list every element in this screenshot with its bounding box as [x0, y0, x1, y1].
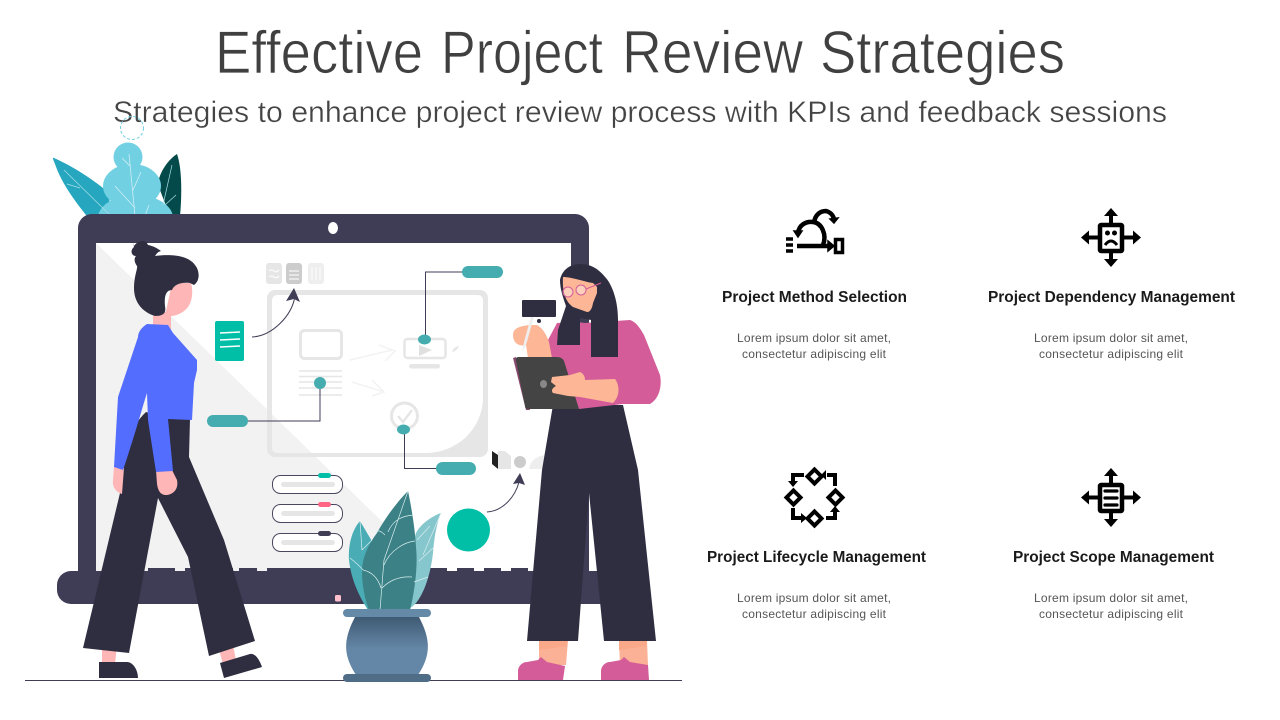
left woman hair [132, 238, 199, 316]
green circle [447, 508, 490, 552]
icon: dependency [1081, 208, 1141, 267]
pot rim [343, 609, 431, 617]
review panel [267, 290, 488, 457]
left woman [83, 238, 262, 678]
heading: Project Dependency Management [988, 289, 1235, 306]
right woman shirt [548, 320, 661, 409]
item: project method selection [722, 211, 907, 361]
tablet [513, 357, 579, 410]
illustration: project review scene [25, 116, 682, 682]
dashed circle decoration [120, 116, 144, 140]
laptop lid [78, 214, 589, 575]
left woman hands [113, 466, 177, 495]
potted plant [343, 491, 441, 682]
heading: Project Lifecycle Management [707, 549, 926, 566]
left woman shoes [99, 654, 262, 678]
laptop screen [96, 243, 571, 573]
icon: lifecycle [786, 470, 842, 526]
left woman trousers [83, 412, 255, 656]
description: Lorem ipsum dolor sit amet, [1034, 331, 1188, 345]
title: Effective [215, 19, 423, 86]
right woman ankles [539, 640, 648, 666]
arrow to tool icons [252, 288, 300, 337]
left woman ankles [102, 640, 236, 665]
description line 2: consectetur adipiscing elit [1039, 347, 1184, 361]
subtitle: Strategies to enhance project review process with KPIs and feedback sessions [113, 96, 1167, 129]
title: Project [441, 19, 603, 86]
black tag [522, 300, 556, 323]
item: project lifecycle management [707, 470, 926, 621]
connector: text callout [207, 377, 326, 427]
connector: video callout [418, 266, 503, 344]
pot foot [343, 674, 431, 682]
connector: check callout [397, 424, 476, 475]
right woman trousers [527, 405, 656, 641]
left woman shirt [114, 324, 197, 472]
camera [328, 222, 338, 234]
description: Lorem ipsum dolor sit amet, [737, 331, 891, 345]
right woman face [563, 277, 597, 312]
right woman shoes [518, 657, 649, 680]
check icon [392, 403, 418, 429]
description: Lorem ipsum dolor sit amet, [737, 591, 891, 605]
background plant [53, 142, 181, 241]
heading: Project Method Selection [722, 289, 907, 306]
icon: method cycle [786, 211, 842, 252]
title: Review [622, 19, 804, 86]
right woman lower hand [551, 372, 618, 403]
image placeholder [300, 330, 342, 358]
item: project scope management [1013, 468, 1214, 621]
laptop [57, 214, 602, 604]
base sensor [335, 595, 341, 602]
shape icons [492, 451, 545, 469]
pen [522, 313, 535, 352]
description line 2: consectetur adipiscing elit [742, 347, 887, 361]
screen shade [96, 243, 435, 573]
icon: scope [1081, 468, 1141, 527]
item: project dependency management [988, 208, 1235, 361]
keyboard notches [148, 568, 528, 571]
status list [272, 473, 342, 552]
title: Strategies [820, 19, 1065, 86]
floor line [25, 680, 682, 681]
description line 2: consectetur adipiscing elit [1039, 607, 1184, 621]
right woman hair [557, 264, 618, 357]
description: Lorem ipsum dolor sit amet, [1034, 591, 1188, 605]
pot body [346, 617, 428, 675]
heading: Project Scope Management [1013, 549, 1214, 566]
description line 2: consectetur adipiscing elit [742, 607, 887, 621]
text lines [299, 371, 342, 395]
right woman raised hand [513, 325, 552, 358]
glasses [563, 283, 601, 297]
video icon [404, 339, 459, 368]
arrow to shape icons [487, 473, 525, 512]
green document [215, 321, 244, 361]
tool icons [266, 263, 324, 284]
plant leaves [349, 491, 441, 610]
flow arrows [350, 345, 395, 396]
laptop base [57, 571, 602, 604]
right woman [513, 264, 661, 680]
left woman neck and face [153, 283, 192, 330]
